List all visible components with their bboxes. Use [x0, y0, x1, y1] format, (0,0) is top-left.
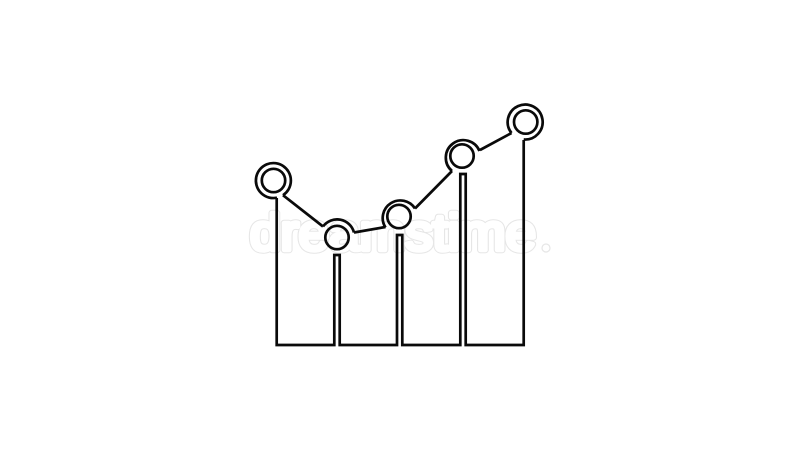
data point 1 — [256, 163, 291, 198]
icon: bar chart outline — [277, 140, 524, 345]
watermark text: dreamstime — [250, 204, 536, 261]
trend segment 2 to 3 — [354, 227, 386, 232]
icon: trend line with data point circles — [256, 105, 543, 249]
data point 4 — [446, 140, 480, 171]
data point 5 — [508, 105, 543, 140]
trend segment 4 to 5 — [480, 133, 512, 150]
watermark text: dreamstime — [250, 204, 536, 261]
data point 3 — [383, 200, 415, 228]
data point 2 — [323, 219, 354, 249]
trend segment 1 to 2 — [283, 195, 323, 226]
trend segment 3 to 4 — [415, 171, 452, 208]
